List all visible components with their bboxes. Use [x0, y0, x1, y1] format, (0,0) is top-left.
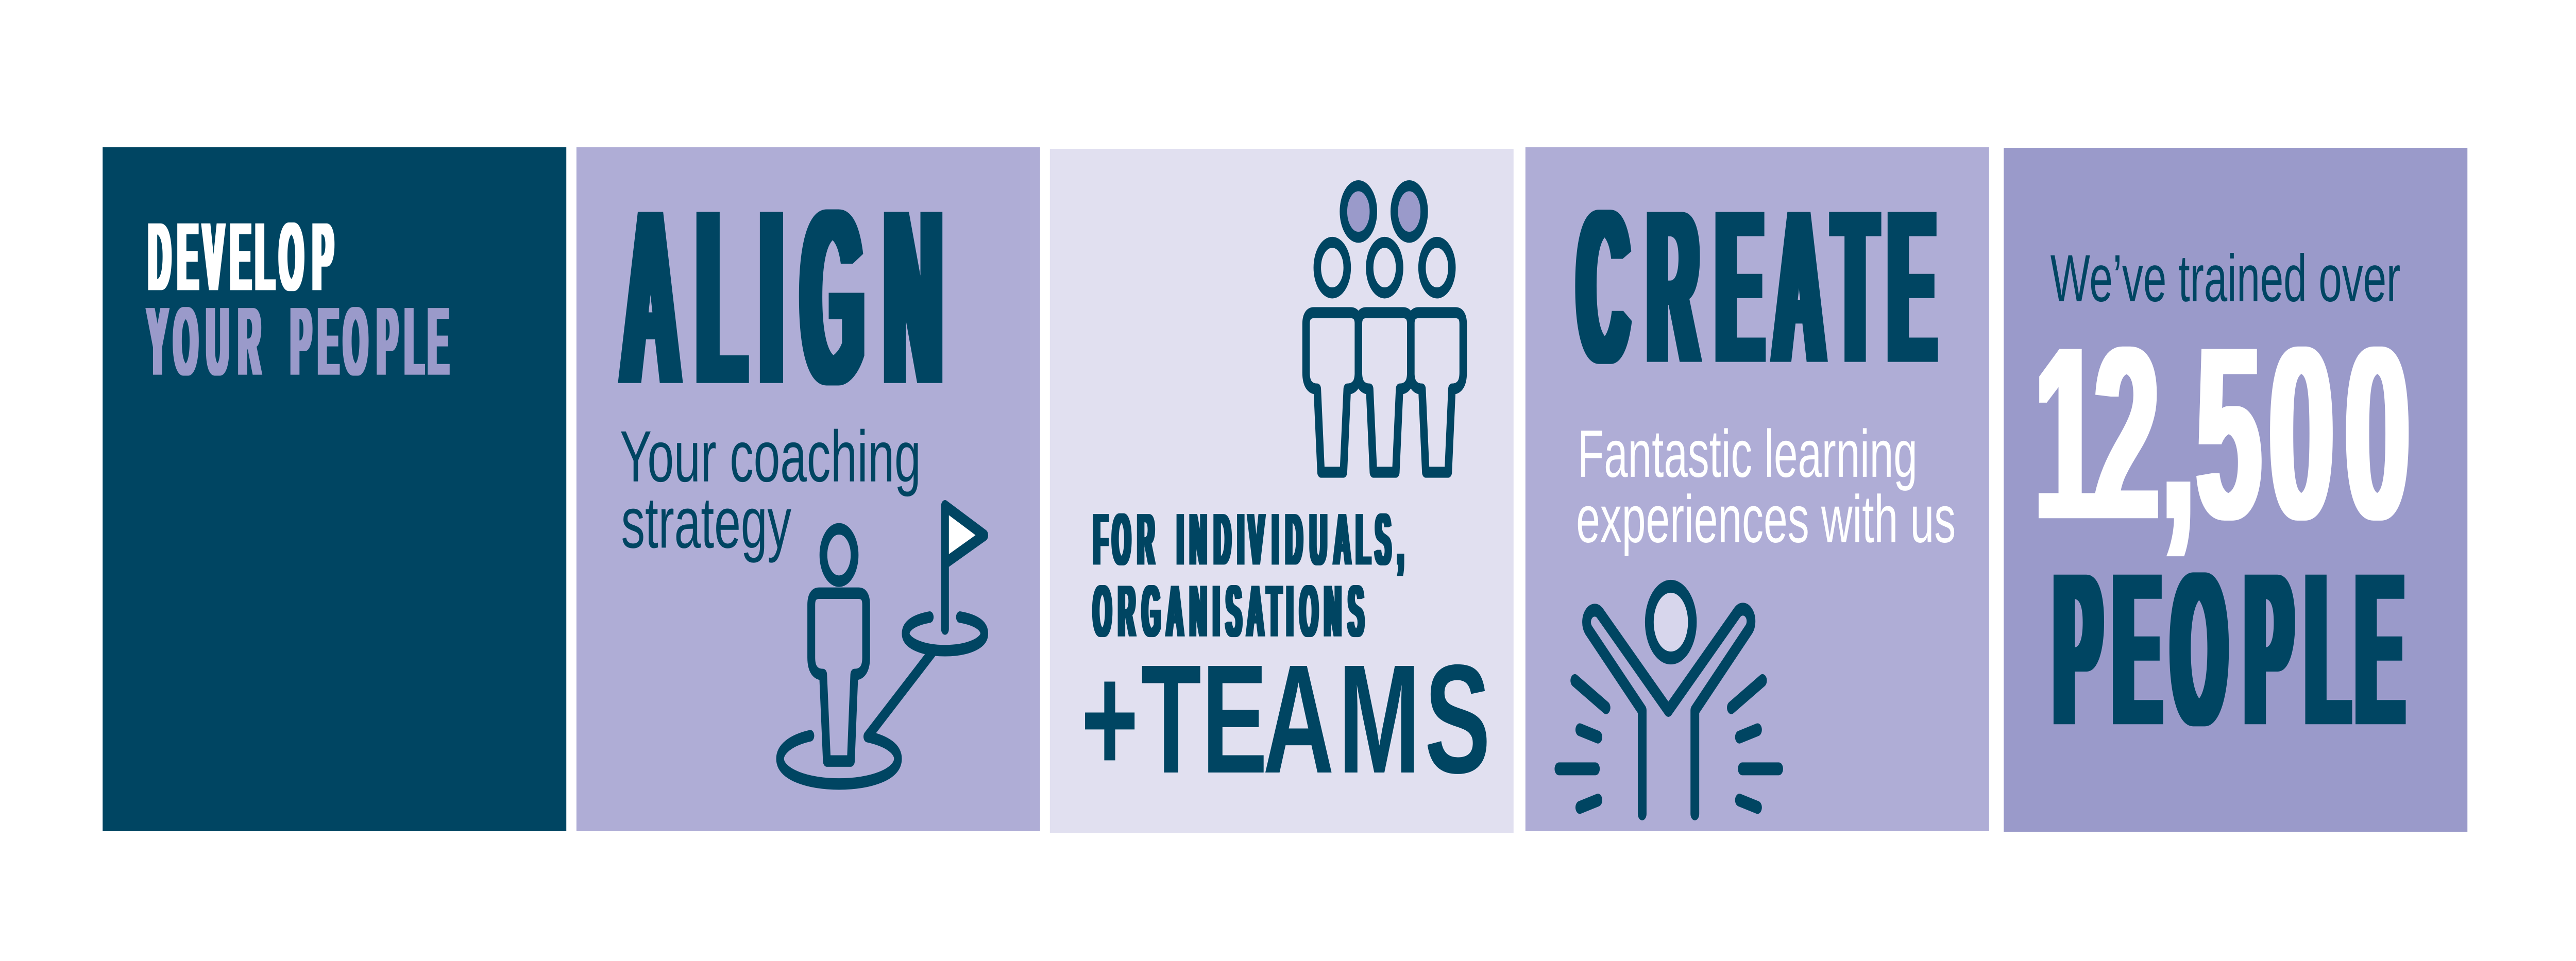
- text: strategy: strategy: [621, 482, 792, 563]
- body with raised arms: [1587, 609, 1751, 814]
- right rays: [1731, 680, 1778, 808]
- text: organisations: ORGANISATIONS: [1093, 571, 1364, 653]
- heading: develop your people: [147, 202, 449, 396]
- text: we've trained over: We’ve trained over: [2050, 242, 2400, 316]
- panel: people trained: [2004, 148, 2467, 832]
- text: for individuals: FOR INDIVIDUALS,: [1093, 499, 1404, 580]
- align content: [620, 158, 984, 784]
- panel background: [1050, 149, 1514, 833]
- panel: align: [577, 147, 1040, 831]
- target ring: [906, 617, 984, 650]
- heading: +teams: +TEAMS: [1081, 633, 1490, 805]
- front row heads: [1317, 243, 1452, 293]
- person body: [811, 593, 866, 761]
- back row heads: [1344, 186, 1424, 237]
- number: 12,500: 12,500: [2035, 297, 2410, 571]
- statistic content: [2035, 242, 2410, 771]
- heading line: develop: DEVELOP: [148, 202, 333, 311]
- heading line: your people: YOUR PEOPLE: [147, 287, 449, 396]
- text: experiences with us: experiences with us: [1576, 481, 1956, 557]
- heading: align: ALIGN: [622, 158, 942, 436]
- panel: individuals, organisations and teams: [1050, 149, 1514, 833]
- heading: people: PEOPLE: [2055, 528, 2403, 771]
- icon: celebrating person: [1559, 586, 1778, 814]
- teams content: [1081, 186, 1490, 805]
- panel: develop your people: [103, 147, 566, 831]
- start ring and route: [780, 651, 933, 784]
- icon: person walking to flag: [780, 506, 984, 784]
- front row bodies: [1306, 313, 1463, 472]
- head: [1649, 586, 1692, 658]
- panel background: [1526, 147, 1989, 831]
- text: fantastic learning: Fantastic learning: [1578, 416, 1918, 491]
- panel background dark: [103, 147, 566, 831]
- panel background: [577, 147, 1040, 831]
- flag: [945, 506, 984, 629]
- text: your coaching: Your coaching: [620, 416, 921, 497]
- icon: group of people: [1306, 186, 1463, 472]
- create content: [1559, 165, 1956, 814]
- panel background: [2004, 148, 2467, 832]
- panel: create: [1526, 147, 1989, 831]
- left rays: [1559, 680, 1606, 808]
- person head: [823, 529, 855, 581]
- heading: create: CREATE: [1578, 165, 1935, 408]
